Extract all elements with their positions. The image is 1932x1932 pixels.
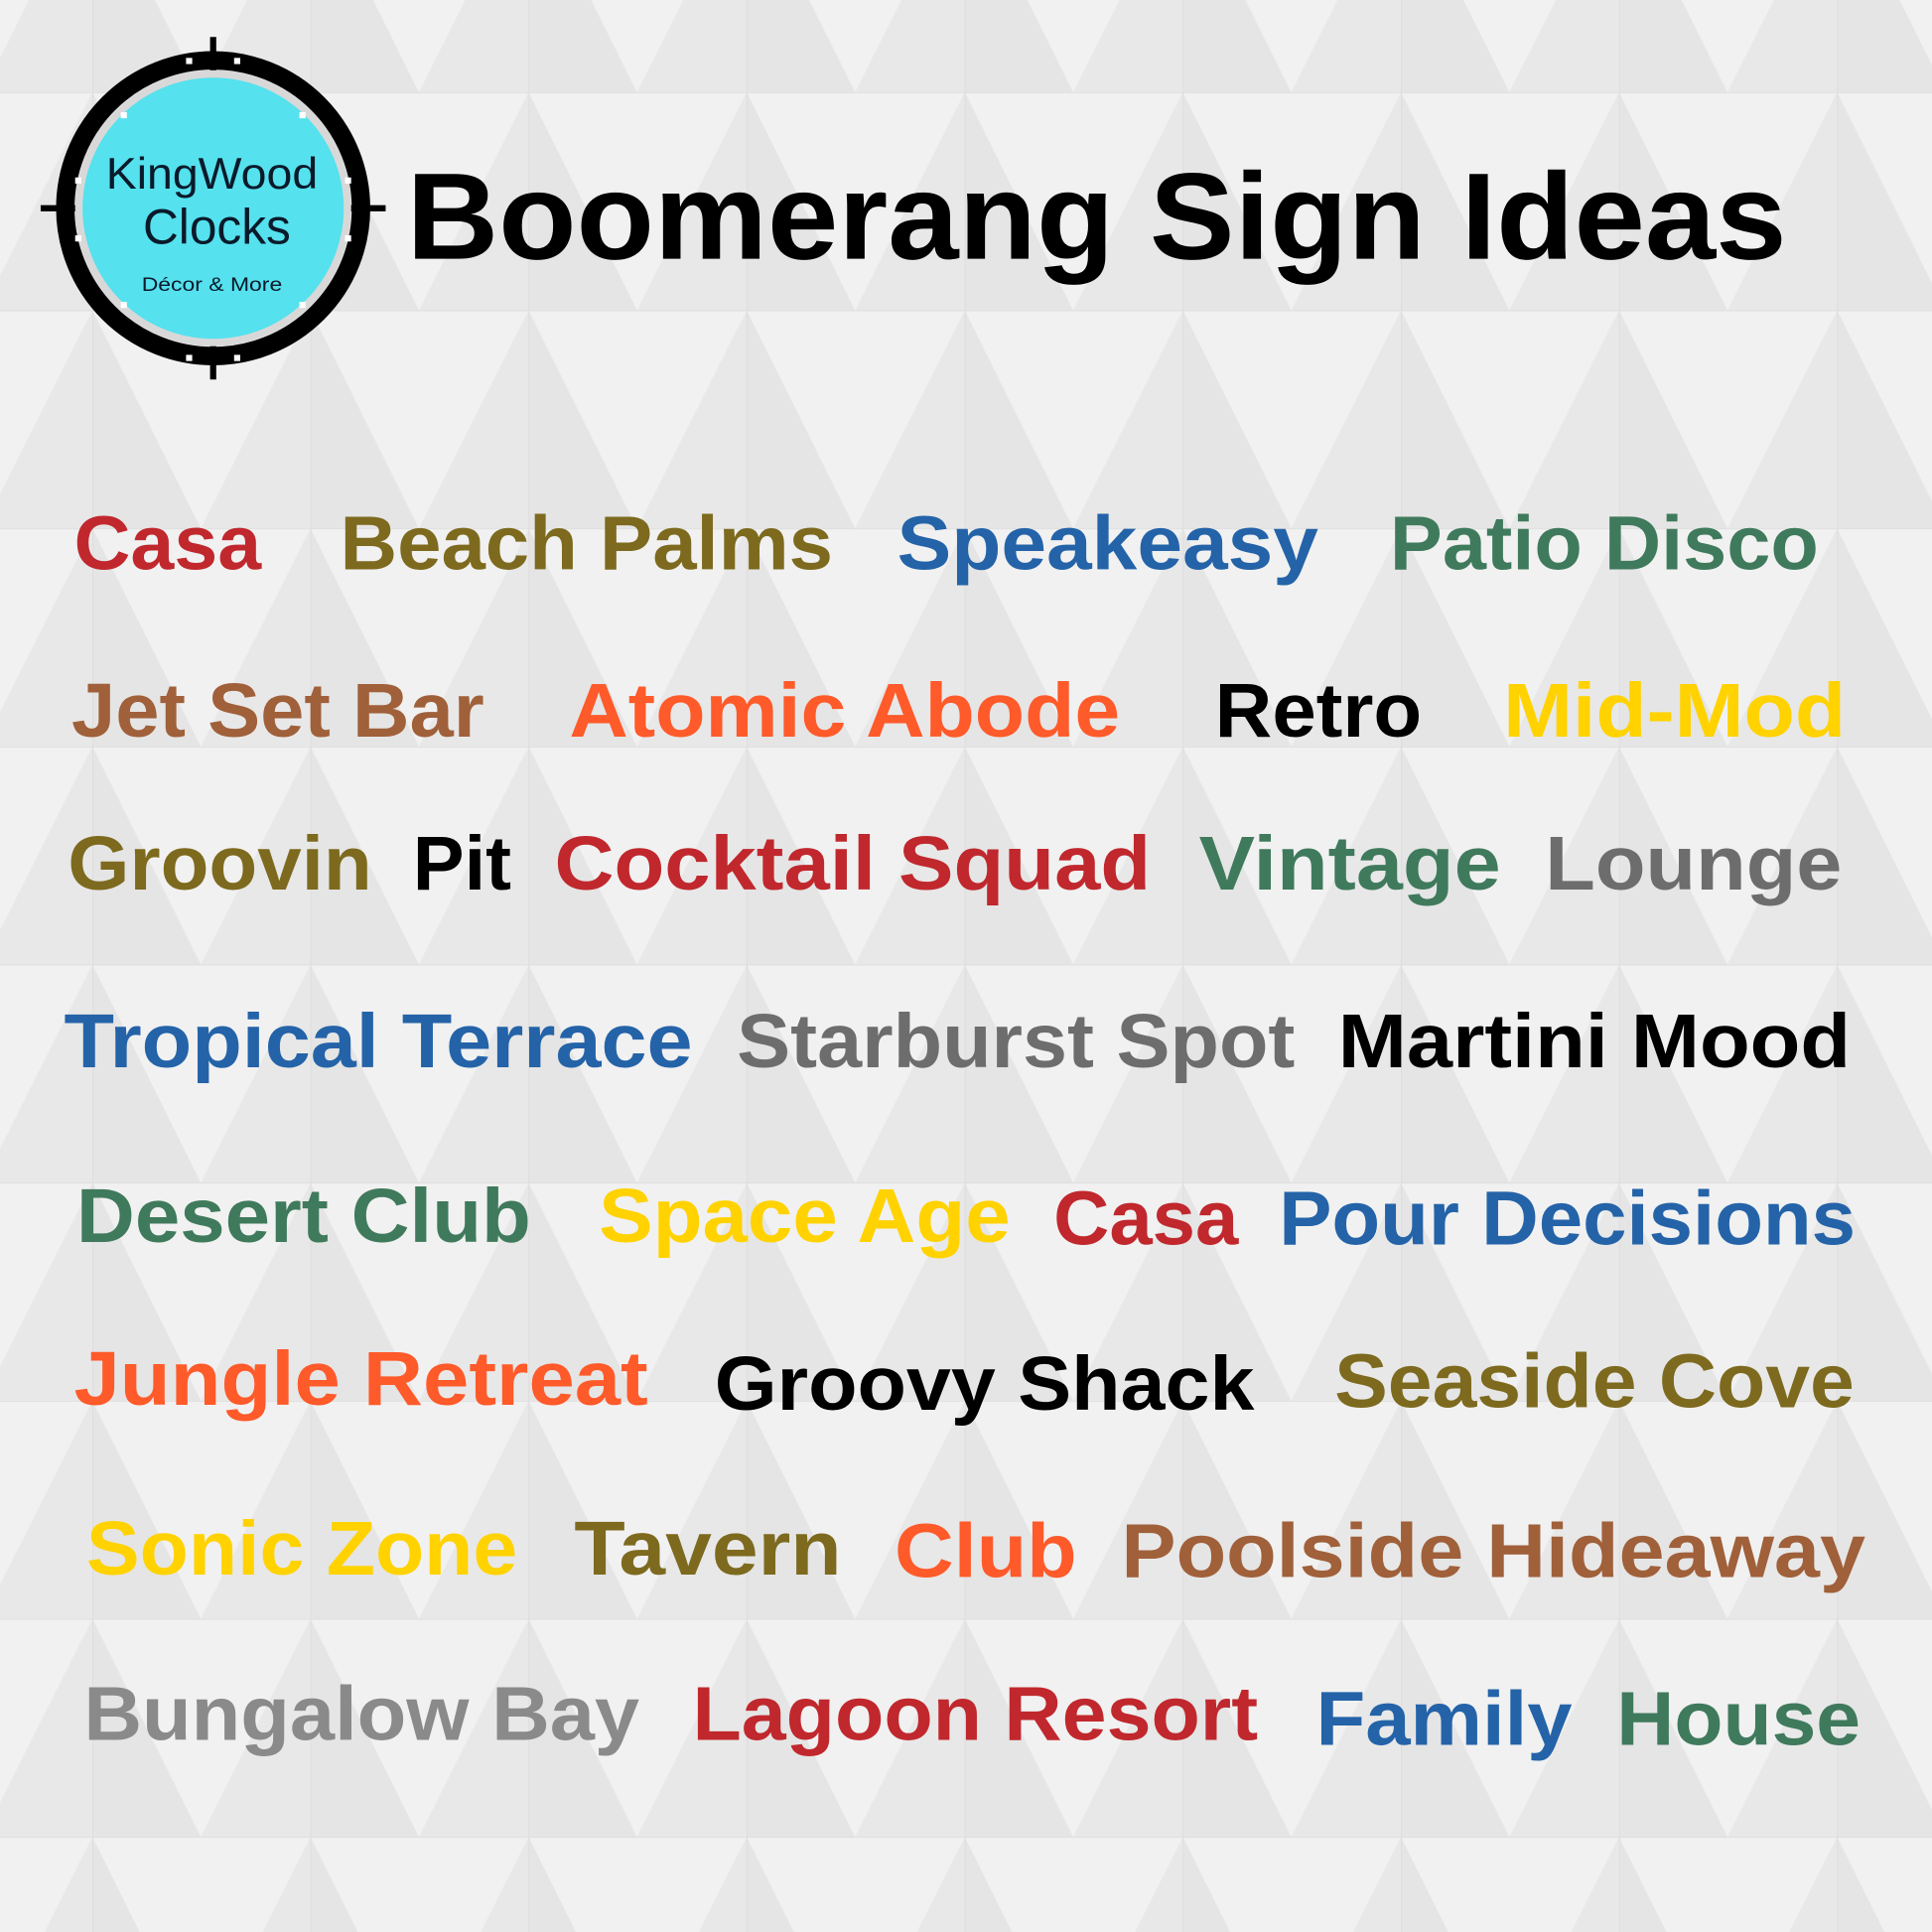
word cloud of sign ideas [65, 500, 1865, 1761]
word cloud of sign ideas: Family [1315, 1676, 1573, 1761]
word cloud of sign ideas: Tropical Terrace [65, 999, 692, 1084]
word cloud of sign ideas: Seaside Cove [1334, 1338, 1855, 1424]
word cloud of sign ideas: Poolside Hideaway [1121, 1509, 1865, 1594]
word cloud of sign ideas: Lagoon Resort [692, 1671, 1258, 1756]
word cloud of sign ideas: Groovin [68, 821, 372, 906]
word cloud of sign ideas: Casa [1053, 1175, 1239, 1261]
word cloud of sign ideas: Starburst Spot [737, 999, 1295, 1084]
word cloud of sign ideas: Lounge [1545, 821, 1842, 906]
logo: KingWood Clocks: KingWood [106, 150, 318, 199]
word cloud of sign ideas: Pit [413, 821, 511, 906]
word cloud of sign ideas: Vintage [1199, 821, 1501, 906]
word cloud of sign ideas: Beach Palms [341, 500, 833, 586]
word cloud of sign ideas: House [1616, 1676, 1861, 1761]
word cloud of sign ideas: Speakeasy [897, 500, 1318, 586]
word cloud of sign ideas: Pour Decisions [1279, 1175, 1856, 1261]
word cloud of sign ideas: Patio Disco [1390, 500, 1819, 586]
word cloud of sign ideas: Jet Set Bar [71, 668, 484, 754]
word cloud of sign ideas: Club [895, 1509, 1077, 1594]
logo: KingWood Clocks [41, 37, 385, 379]
word cloud of sign ideas: Casa [73, 500, 262, 586]
word cloud of sign ideas: Cocktail Squad [554, 821, 1151, 906]
word cloud of sign ideas: Atomic Abode [569, 668, 1120, 754]
word cloud of sign ideas: Space Age [599, 1173, 1011, 1259]
word cloud of sign ideas: Mid-Mod [1503, 668, 1846, 754]
title: Boomerang Sign Ideas [407, 149, 1787, 286]
word cloud of sign ideas: Groovy Shack [715, 1341, 1255, 1427]
word cloud of sign ideas: Desert Club [76, 1173, 531, 1259]
word cloud of sign ideas: Sonic Zone [86, 1506, 517, 1591]
logo: KingWood Clocks: Décor & More [142, 274, 282, 296]
logo: KingWood Clocks: Clocks [143, 200, 291, 255]
word cloud of sign ideas: Bungalow Bay [83, 1671, 639, 1756]
word cloud of sign ideas: Martini Mood [1338, 999, 1851, 1084]
word cloud of sign ideas: Jungle Retreat [73, 1336, 648, 1422]
word cloud of sign ideas: Retro [1215, 668, 1422, 754]
word cloud of sign ideas: Tavern [574, 1506, 842, 1591]
